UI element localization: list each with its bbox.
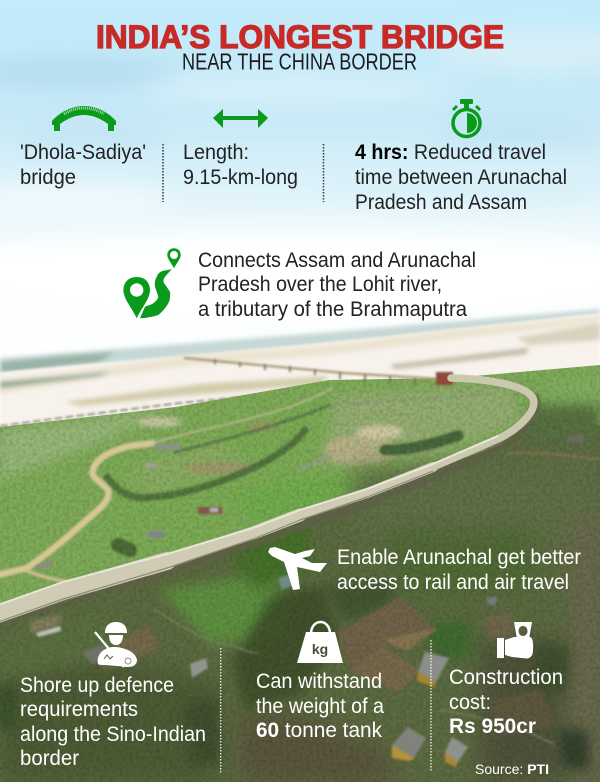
text: withstand weight: Can withstand xyxy=(256,670,382,693)
text: connects Assam and Arunachal xyxy=(198,249,476,321)
pale ground patches xyxy=(138,417,404,474)
left green field xyxy=(164,389,277,408)
fact: connects states xyxy=(123,248,476,321)
text: rail and air: Enable Arunachal get better xyxy=(337,546,581,569)
source: Source: PTI xyxy=(475,761,549,777)
subtitle: NEAR THE CHINA BORDER xyxy=(182,48,417,74)
text: withstand weight: 60 tonne tank xyxy=(256,719,382,742)
text: withstand weight: the weight of a xyxy=(256,695,384,718)
text: length: Length: xyxy=(183,141,249,164)
icon: airplane xyxy=(268,547,327,590)
far horizon xyxy=(0,309,600,375)
text: Dhola-Sadiya bridge xyxy=(20,141,146,189)
main curved bridge deck xyxy=(0,378,537,624)
text: rail and air: access to rail and air travel xyxy=(337,571,569,594)
land below the bridge xyxy=(0,405,600,782)
text: connects Assam and Arunachal: Pradesh over the Lohit river, xyxy=(198,273,442,296)
fact: construction cost xyxy=(449,622,563,738)
text: construction cost: Rs 950cr xyxy=(449,715,536,738)
text: rail and air xyxy=(337,546,581,594)
text: construction cost: Construction xyxy=(449,666,563,689)
land xyxy=(0,360,600,782)
fact: travel time xyxy=(355,99,567,214)
fact: defence xyxy=(20,622,206,770)
fact: rail and air access xyxy=(268,546,581,594)
text: reduced travel time: time between Arunachal xyxy=(355,166,567,189)
bridge piers across river xyxy=(184,358,453,385)
icon: kg weight: kg xyxy=(312,641,328,657)
text: length xyxy=(183,141,298,189)
icon: double arrow xyxy=(213,109,268,128)
fact: length xyxy=(183,109,298,189)
right of curve xyxy=(540,370,600,402)
sky with clouds xyxy=(0,0,600,370)
title: INDIA’S LONGEST BRIDGE xyxy=(96,19,504,55)
text: defence requirements: along the Sino-Indian xyxy=(20,723,206,746)
fact: bridge name xyxy=(20,106,146,189)
text: Dhola-Sadiya bridge: bridge xyxy=(20,166,76,189)
text: length: 9.15-km-long xyxy=(183,166,298,189)
icon: hand holding money xyxy=(497,622,533,658)
icon: stopwatch xyxy=(453,99,480,136)
photo grain xyxy=(0,360,600,782)
houses xyxy=(35,435,584,767)
text: defence requirements: requirements xyxy=(20,698,138,721)
text: reduced travel time: Pradesh and Assam xyxy=(355,191,527,214)
icon: route with map pins xyxy=(123,248,181,318)
text: reduced travel time: 4 hrs: Reduced travel xyxy=(355,141,546,164)
text: connects Assam and Arunachal: a tributary of the Brahmaputra xyxy=(198,298,467,321)
text: construction cost xyxy=(449,666,563,738)
river xyxy=(0,313,600,430)
text: reduced travel time xyxy=(355,141,567,214)
tree lines xyxy=(107,393,490,550)
text: defence requirements: Shore up defence xyxy=(20,674,174,697)
fact: tank weight xyxy=(256,622,384,742)
text: defence requirements: border xyxy=(20,747,79,770)
text: defence requirements xyxy=(20,674,206,770)
icon: arch bridge xyxy=(52,106,116,131)
text: construction cost: cost: xyxy=(449,691,491,714)
inner fields xyxy=(100,385,520,560)
text: withstand weight xyxy=(256,670,384,742)
text: Dhola-Sadiya bridge: 'Dhola-Sadiya' xyxy=(20,141,146,164)
icon: soldier with rifle xyxy=(95,622,137,667)
text: connects Assam and Arunachal: Connects Assam and Arunachal xyxy=(198,249,476,272)
dirt road xyxy=(0,388,332,583)
